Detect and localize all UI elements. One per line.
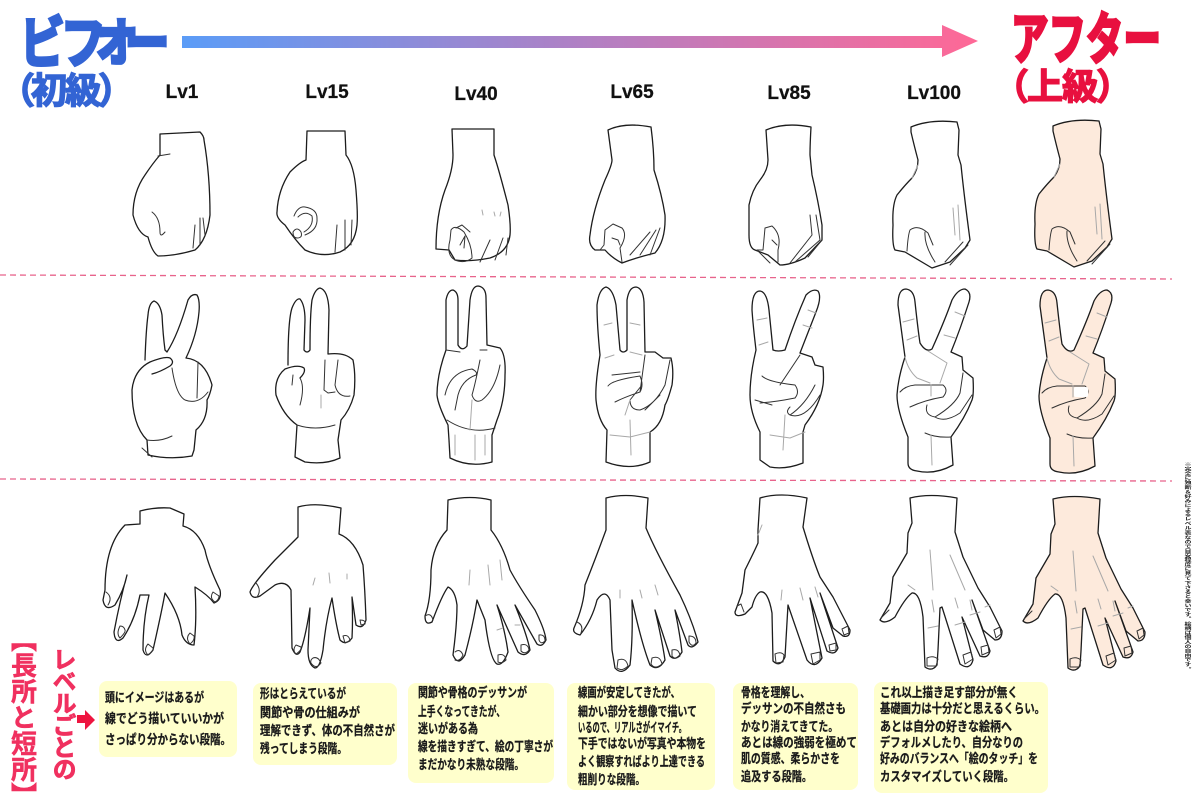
level labels: Lv1 bbox=[166, 82, 199, 103]
back of hand Lv65 bbox=[574, 496, 698, 671]
box Lv40: まだかなり未熟な段階。 bbox=[418, 757, 524, 772]
back of hand Lv100 bbox=[880, 496, 1002, 669]
peace Lv65 bbox=[596, 287, 673, 466]
box Lv40 bbox=[408, 683, 554, 783]
box Lv40: 線を描きすぎて、絵の丁寧さが bbox=[418, 739, 553, 754]
back of hand Lv1 bbox=[103, 508, 220, 655]
box Lv15: 関節や骨の仕組みが bbox=[260, 705, 360, 720]
box Lv85: 肌の質感、柔らかさを bbox=[741, 751, 840, 766]
fist after colored bbox=[1035, 120, 1112, 267]
title: after (advanced) bbox=[993, 8, 1161, 107]
box Lv85: 追及する段階。 bbox=[741, 769, 812, 784]
row: peace signs bbox=[132, 286, 1115, 473]
title: before (beginner): （初級） bbox=[0, 70, 134, 111]
small arrow to boxes bbox=[77, 710, 95, 730]
box Lv100: カスタマイズしていく段階。 bbox=[880, 769, 1014, 784]
fist Lv85 bbox=[749, 125, 822, 265]
back of hand after colored bbox=[1023, 496, 1145, 670]
fist Lv15 bbox=[277, 131, 357, 255]
box Lv65: 粗削りな段階。 bbox=[578, 772, 645, 787]
box Lv100: 好みのバランスへ「絵のタッチ」を bbox=[880, 751, 1038, 766]
peace Lv40 bbox=[437, 286, 505, 464]
box Lv100 bbox=[874, 682, 1048, 793]
level labels: Lv65 bbox=[610, 82, 654, 103]
box Lv85: かなり消えてきてた。 bbox=[741, 719, 838, 734]
back of hand Lv85 bbox=[735, 495, 850, 665]
box Lv40: 上手くなってきたが、 bbox=[418, 704, 505, 719]
peace Lv15 bbox=[276, 288, 355, 463]
fist Lv100 bbox=[893, 121, 970, 268]
box Lv85: 骨格を理解し、 bbox=[741, 685, 810, 700]
box Lv65: 下手ではないが写真や本物を bbox=[578, 736, 706, 751]
back of hand Lv15 bbox=[250, 505, 366, 668]
box Lv100: デフォルメしたり、自分なりの bbox=[880, 735, 1023, 750]
box Lv1 bbox=[99, 681, 237, 757]
box Lv85: あとは線の強弱を極めて bbox=[741, 735, 857, 750]
row: fists bbox=[133, 120, 1112, 268]
box Lv40: 迷いがある為 bbox=[418, 721, 478, 736]
box Lv65: 線画が安定してきたが、 bbox=[578, 685, 680, 700]
box Lv100: これ以上描き足す部分が無く bbox=[880, 685, 1018, 700]
row: back of hands bbox=[103, 495, 1145, 671]
box Lv40: 関節や骨格のデッサンが bbox=[418, 685, 527, 700]
title: before (beginner): ビ bbox=[20, 12, 65, 75]
back of hand Lv40 bbox=[425, 498, 546, 664]
panel: explanation boxes bbox=[99, 681, 1048, 793]
side note: ※完全に独断＆好みによるレベル表なので目安程度に見て下さると幸いです。絵柄は個人の自由です。 bbox=[1184, 462, 1191, 671]
box Lv65: よく観察すればより上達できる bbox=[578, 754, 705, 769]
box Lv15: 形はとらえているが bbox=[260, 686, 346, 701]
vertical heading: per-level: レベルごとの bbox=[48, 647, 75, 779]
peace Lv85 bbox=[750, 290, 824, 468]
title: before (beginner): ォ bbox=[91, 2, 141, 71]
fist Lv1 bbox=[133, 132, 210, 256]
title: before (beginner): フ bbox=[61, 12, 106, 75]
box Lv1: 線でどう描いていいかが bbox=[105, 711, 224, 726]
level labels bbox=[166, 82, 961, 105]
title: after (advanced): （上級） bbox=[993, 66, 1132, 107]
peace after colored bbox=[1039, 290, 1115, 473]
box Lv100: 基礎画力は十分だと思えるくらい。 bbox=[880, 701, 1045, 716]
level labels: Lv40 bbox=[454, 84, 498, 105]
level labels: Lv85 bbox=[767, 83, 811, 104]
box Lv100: あとは自分の好きな絵柄へ bbox=[880, 719, 1012, 734]
progress arrow bbox=[182, 25, 978, 57]
fist Lv40 bbox=[436, 129, 510, 262]
level labels: Lv15 bbox=[305, 82, 349, 103]
fist Lv65 bbox=[590, 125, 665, 263]
peace Lv1 bbox=[132, 295, 212, 458]
box Lv65: 細かい部分を想像で描いて bbox=[578, 704, 697, 719]
box Lv65: いるので、リアルさがイマイチ。 bbox=[578, 720, 686, 735]
title: before (beginner) bbox=[0, 2, 170, 111]
box Lv85 bbox=[733, 683, 858, 790]
box Lv15: 残ってしまう段階。 bbox=[260, 741, 347, 756]
box Lv65 bbox=[567, 683, 715, 790]
box Lv15 bbox=[253, 683, 397, 765]
box Lv15: 理解できず、体の不自然さが bbox=[260, 723, 395, 738]
box Lv85: デッサンの不自然さも bbox=[741, 701, 846, 716]
box Lv1: 頭にイメージはあるが bbox=[105, 690, 204, 705]
level labels: Lv100 bbox=[907, 83, 961, 104]
title: before (beginner): ー bbox=[125, 12, 170, 75]
peace Lv100 bbox=[897, 289, 973, 472]
box Lv1: さっぱり分からない段階。 bbox=[105, 732, 231, 747]
